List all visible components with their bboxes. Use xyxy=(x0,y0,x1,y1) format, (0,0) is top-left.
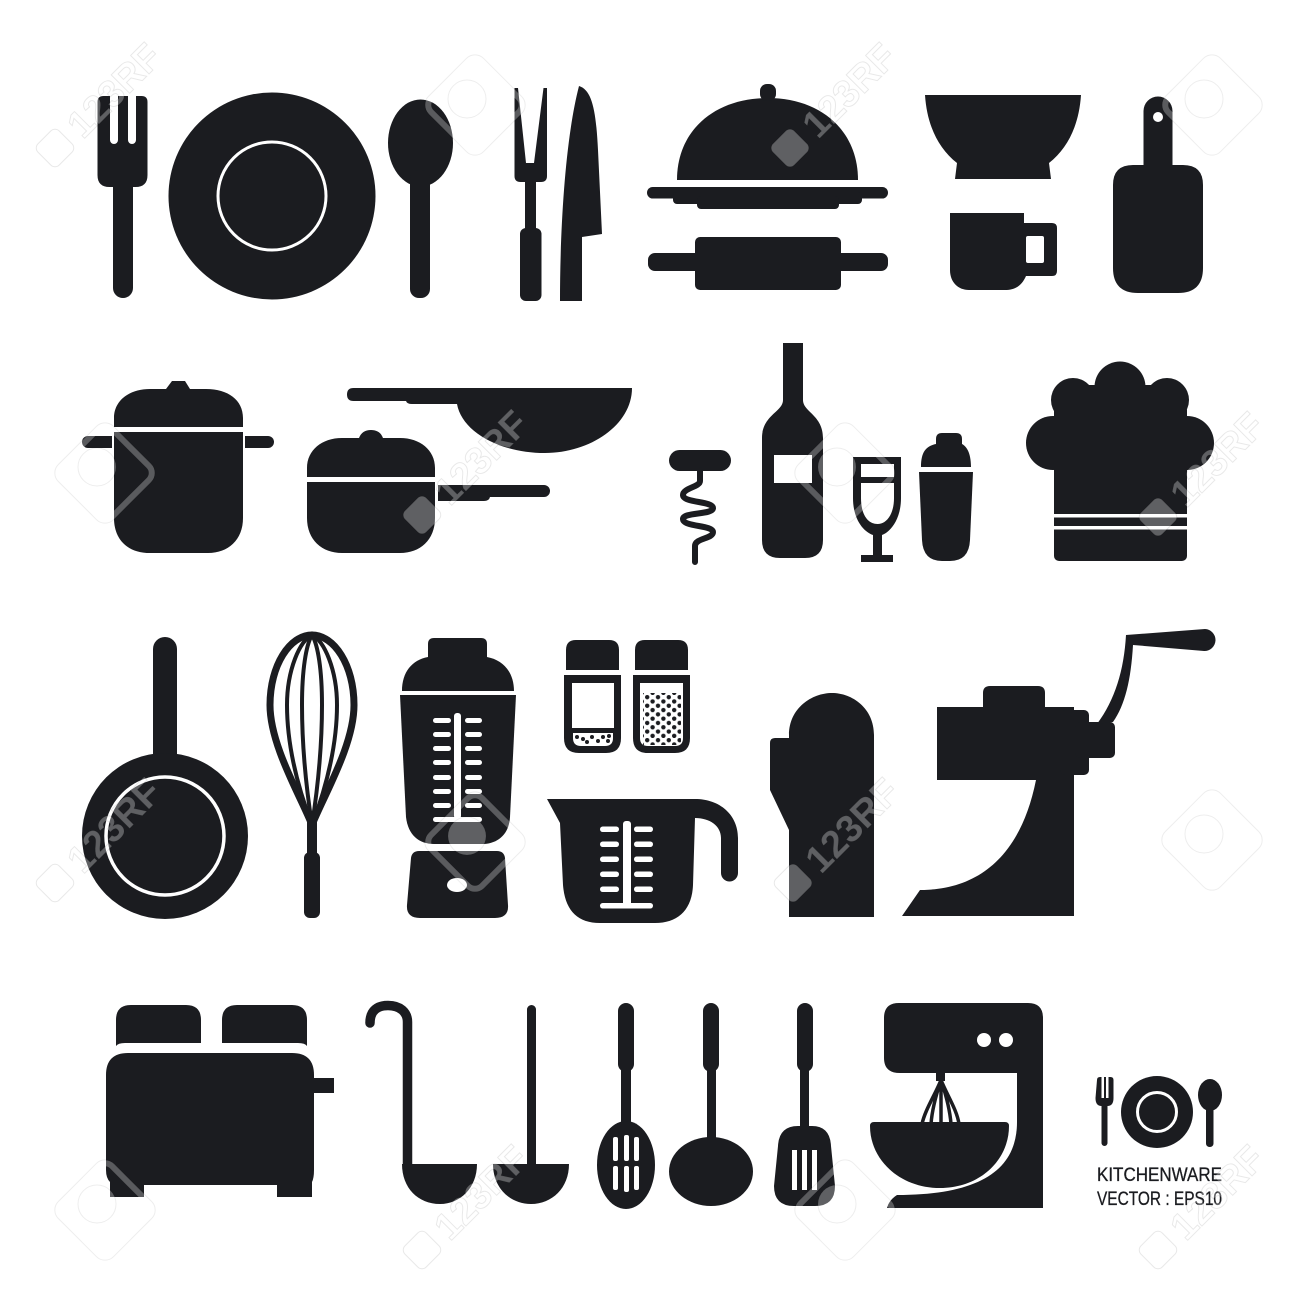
icon: ladle xyxy=(493,1005,569,1204)
icon: cocktail shaker xyxy=(919,433,973,561)
watermarks: 123RF xyxy=(427,403,537,513)
icon: spoon xyxy=(388,100,453,298)
icon: plate xyxy=(168,92,376,300)
icon: stock pot xyxy=(82,381,274,553)
icon: mug xyxy=(950,213,1057,290)
icon: serving spoon xyxy=(669,1003,753,1206)
watermarks: 123RF xyxy=(798,771,908,881)
icon: wok xyxy=(347,388,632,453)
caption: vector format: VECTOR : EPS10 xyxy=(1097,1189,1222,1210)
icon: spatula xyxy=(774,1003,835,1206)
icon: pepper shaker xyxy=(633,640,690,753)
icon: hand-crank stand mixer xyxy=(902,629,1216,916)
icon: chef hat xyxy=(1026,362,1214,561)
watermarks: 123RF xyxy=(60,36,170,146)
watermarks: 123RF xyxy=(1163,405,1273,515)
icon: wine bottle xyxy=(762,343,823,558)
icon: cutting board xyxy=(1113,96,1203,293)
icon: toaster xyxy=(106,1005,334,1197)
icon: serving cloche xyxy=(647,84,888,209)
icon: hooked ladle xyxy=(370,1006,477,1204)
icon: bowl xyxy=(925,95,1081,179)
icon: carving fork xyxy=(514,88,547,301)
icon: rolling pin xyxy=(648,237,888,290)
watermarks: 123RF xyxy=(1163,1138,1273,1248)
icon: wine glass xyxy=(853,457,901,562)
icon: blender xyxy=(400,638,516,918)
logo: fork, plate and spoon mark xyxy=(1096,1076,1222,1148)
watermarks: 123RF xyxy=(795,36,905,146)
icon: fork xyxy=(98,96,148,298)
icon: slotted spoon xyxy=(597,1003,655,1209)
icon: saucepan xyxy=(307,430,550,553)
icon: frying pan xyxy=(82,637,248,919)
icon: corkscrew xyxy=(669,450,731,562)
icon: whisk xyxy=(270,635,354,918)
icon: salt shaker xyxy=(564,640,621,753)
icon: measuring cup xyxy=(547,799,738,923)
caption: kitchenware: KITCHENWARE xyxy=(1097,1165,1222,1186)
icon: oven mitt xyxy=(770,693,874,917)
icon: electric stand mixer xyxy=(870,1003,1043,1208)
watermarks: 123RF xyxy=(60,771,170,881)
watermarks: 123RF xyxy=(427,1138,537,1248)
icon: knife xyxy=(560,86,602,301)
